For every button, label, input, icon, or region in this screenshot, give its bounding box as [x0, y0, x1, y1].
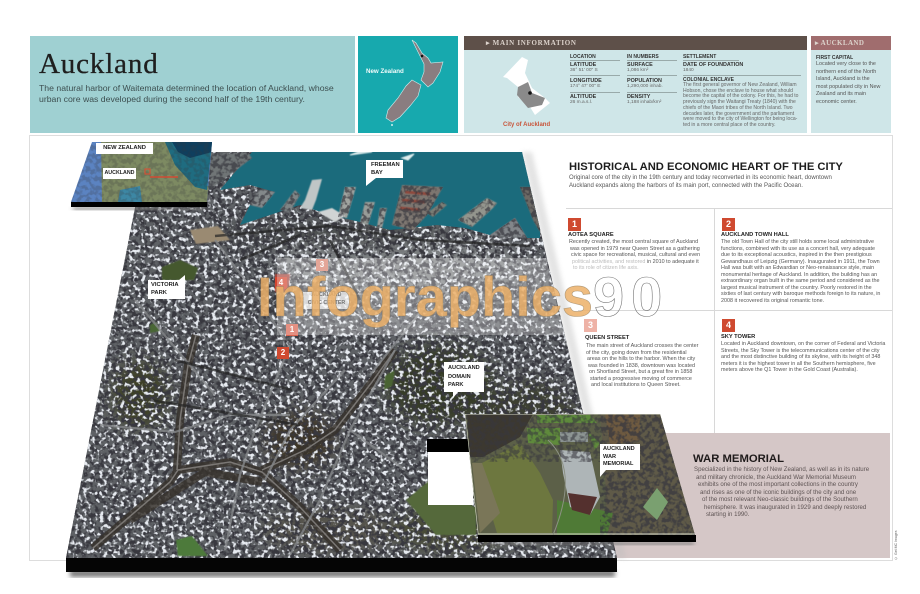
body: Hall was built with an Edwardian or Neo-renaissance style, main	[721, 265, 874, 271]
body: and the most distinctive building of its skyline, with its height of 348	[721, 354, 880, 360]
callout text: AUCKLAND	[448, 365, 480, 371]
text: War Memorial description: of the most relevant Neo-classic buildings of the Southern	[702, 496, 858, 503]
body: extraordinary organ built in the same period and considered as the	[721, 278, 880, 284]
piers	[210, 152, 540, 238]
column: in numbers	[627, 54, 677, 105]
inset: New Zealand satellite map	[70, 142, 212, 210]
body: monumental heritage of Auckland. In addition, the building has an	[721, 272, 877, 278]
motorways	[93, 335, 395, 550]
label: Auckland Civic Center: AUCKLAND	[311, 292, 342, 298]
text: first capital: Zealand and its main	[816, 91, 866, 97]
body: Gewandhaus of Leipzig (Germany). Inaugurated in 1911, the Town	[721, 258, 880, 264]
text: colonial enclave	[683, 82, 798, 128]
column: in numbers: 1,086 km²	[627, 68, 648, 73]
text: first capital: northern end of the North	[816, 69, 876, 75]
item 1: Aotea Square	[568, 218, 700, 271]
aerial map of downtown Auckland	[66, 151, 624, 578]
body	[721, 341, 886, 373]
column: settlement	[683, 54, 801, 128]
body	[586, 343, 698, 388]
callout text: PARK	[151, 290, 167, 296]
column: location: 36° 51' 00" S	[570, 68, 598, 73]
map marker 3	[316, 259, 328, 271]
panel: Auckland first capital	[811, 36, 891, 133]
body: on Shortland Street, but a great fire in 1858	[589, 369, 692, 375]
aerial image	[60, 150, 620, 560]
number 2: 2	[726, 219, 731, 229]
body: due to its exceptional acoustics, inspired in the then prestigious	[721, 252, 872, 258]
body: meters above the Q1 Tower in the Gold Coast (Australia).	[721, 367, 858, 373]
column: settlement: DATE OF FOUNDATION	[683, 62, 743, 68]
map marker 1	[286, 324, 298, 336]
harbour water	[220, 152, 540, 238]
label: New Zealand inset	[96, 143, 153, 154]
body: The main street of Auckland crosses the center	[586, 343, 698, 349]
callout text	[371, 162, 400, 176]
text: first capital: Located very close to the	[816, 61, 876, 67]
callout: Auckland War Memorial	[600, 444, 640, 477]
subheading: first capital: FIRST CAPITAL	[816, 55, 853, 61]
number 2	[722, 218, 735, 231]
panel: main information	[464, 36, 807, 133]
header text: ▸ AUCKLAND	[815, 39, 864, 47]
text: War Memorial description: Specialized in the history of New Zealand, as well as in its nature	[694, 466, 869, 473]
map marker 4: 4	[279, 278, 283, 287]
column: in numbers: 1,290,000 inhab.	[627, 84, 663, 89]
body: civic space for recreational, musical, cultural and even	[571, 252, 700, 258]
title: AOTEA SQUARE	[568, 232, 614, 238]
column: settlement: COLONIAL ENCLAVE	[683, 77, 734, 83]
callout text	[448, 365, 480, 388]
text: War Memorial description: starting in 1990.	[706, 511, 749, 518]
heading: SETTLEMENT	[683, 54, 716, 60]
body	[569, 239, 700, 271]
body: to its role of citizen life axis.	[573, 265, 639, 271]
map: City of Auckland	[503, 57, 550, 115]
title: QUEEN STREET	[585, 335, 629, 341]
heading: historical and economic heart: HISTORICAL AND ECONOMIC HEART OF THE CITY	[569, 161, 843, 173]
map shadow on right	[522, 152, 626, 558]
map marker 4	[275, 277, 287, 289]
label: City of Auckland: City of Auckland	[503, 122, 550, 128]
column: in numbers: 1,188 inhab/km²	[627, 100, 661, 105]
column: in numbers: DENSITY	[627, 94, 650, 100]
credit: © Get MC Images	[894, 531, 898, 560]
callout text: DOMAIN	[448, 374, 471, 380]
text: first capital: economic center.	[816, 99, 857, 105]
heading: LOCATION	[570, 54, 596, 60]
text: colonial enclave: become the capital of the colony. For this, he had to	[683, 93, 798, 99]
body	[721, 239, 880, 304]
icon: New Zealand map	[386, 40, 444, 126]
item 3: Queen Street	[584, 319, 698, 388]
callout text: AUCKLAND	[603, 446, 635, 452]
body: Recently created, the most central square of Auckland	[569, 239, 698, 245]
body: was opened in 1979 near Queen Street as a gathering	[570, 246, 700, 252]
heading: War Memorial: WAR MEMORIAL	[693, 453, 784, 465]
panel: War Memorial	[610, 433, 890, 558]
body: started a progressive moving of commerce	[590, 376, 692, 382]
panel: New Zealand locator map	[358, 36, 458, 133]
map base shadow	[66, 558, 617, 577]
callout text: MEMORIAL	[603, 461, 633, 467]
text: War Memorial description: and military chronicle, the Auckland War Memorial Museum	[696, 474, 856, 480]
column: location: ALTITUDE	[570, 94, 596, 100]
panel: main frame	[29, 135, 893, 561]
body: 2008 it recovered its original romantic tone.	[721, 298, 824, 304]
body: functions, combined with its use as a concert hall, very adequate	[721, 246, 875, 252]
text: War Memorial description	[694, 466, 869, 518]
body: of the city, going down from the residential	[586, 350, 687, 356]
label: Auckland inset	[103, 168, 136, 179]
callout text	[151, 282, 179, 296]
text: section introduction: Auckland expands along the harbors of its main port, connected with the Pacific Ocean.	[569, 183, 803, 189]
callout text	[603, 446, 635, 467]
green areas	[150, 226, 476, 556]
heading: Auckland: Auckland	[39, 48, 159, 80]
heading: IN NUMBERS	[627, 54, 659, 60]
label: New Zealand: New Zealand	[366, 68, 404, 75]
text: War Memorial description: exhibits one of the most important collections in the country	[698, 481, 858, 488]
title: AUCKLAND TOWN HALL	[721, 232, 789, 238]
text: first capital: most populated city in New	[816, 84, 880, 90]
text: section introduction	[569, 174, 832, 189]
item 4: Sky Tower	[721, 319, 886, 373]
text: first capital: Island, Auckland is the	[816, 76, 870, 82]
map marker 3: 3	[320, 260, 324, 269]
number 4	[722, 319, 735, 332]
body: was founded in 1838, downtown was located	[588, 362, 695, 368]
column: settlement: 1840	[683, 68, 694, 73]
header text: ▸ MAIN INFORMATION	[486, 39, 577, 47]
text: colonial enclave: were moved to the city of Wellington for being loca-	[683, 116, 797, 122]
title: SKY TOWER	[721, 334, 755, 340]
body: areas on the hills to the harbor. When the city	[587, 356, 695, 362]
body: Located in Auckland downtown, on the corner of Federal and Victoria	[721, 341, 885, 347]
text: colonial enclave: Hobson, chose the enclave to house what should	[683, 88, 793, 94]
body: Streets, the Sky Tower is the telecommunications center of the city	[721, 348, 879, 354]
text: colonial enclave: decades later, the government and the parliament	[683, 111, 794, 117]
panel: title	[30, 36, 355, 133]
callout text: WAR	[603, 454, 616, 460]
body: and local institutions to Queen Street.	[591, 382, 681, 388]
text: War Memorial description: and rises as one of the iconic buildings of the city and one	[700, 488, 856, 496]
body: sixties of last century with baroque methods foreign to its nature, in	[721, 291, 880, 297]
text: colonial enclave: The first general governor of New Zealand, William	[683, 82, 797, 88]
number 1	[568, 218, 581, 231]
map marker 2	[277, 347, 289, 359]
label: Auckland inset: AUCKLAND	[104, 170, 134, 176]
column: location: 26 m.a.s.l.	[570, 100, 592, 105]
inset: War Memorial aerial	[465, 414, 696, 546]
callout text: FREEMAN	[371, 162, 400, 168]
streets	[100, 240, 430, 555]
text: colonial enclave: previously sign the Waitangi Treaty (1840) with the	[683, 99, 796, 105]
body: meters it is the highest tower in all the Southern hemisphere, five	[721, 360, 876, 366]
callout text: VICTORIA	[151, 282, 179, 288]
label: Auckland Civic Center	[303, 292, 350, 309]
callout text: BAY	[371, 170, 383, 176]
body: The old Town Hall of the city still holds some local administrative	[721, 239, 874, 245]
column: location: 174° 47' 00" E	[570, 84, 600, 89]
text: title introduction: urban core was developed during the second half of the 19th century.	[39, 94, 305, 104]
column: location: LATITUDE	[570, 62, 596, 68]
number 3: 3	[588, 320, 593, 330]
header: Auckland	[811, 36, 891, 50]
callout text: PARK	[448, 382, 463, 388]
map marker 1: 1	[290, 325, 294, 334]
callout: Victoria Park	[148, 275, 185, 299]
map marker 2: 2	[281, 348, 285, 357]
text: section introduction: Original core of the city in the 19th century and today reconverted in its economic heart, downtown	[569, 175, 832, 181]
watermark: Infographics90: Infographics90	[257, 265, 669, 328]
body: political activities, and restored in 2010 to adequate it	[572, 258, 699, 264]
label: New Zealand inset: NEW ZEALAND	[103, 145, 146, 151]
text: colonial enclave: ted in a more central place of the country.	[683, 122, 775, 128]
column: in numbers: SURFACE	[627, 62, 653, 68]
header: main information	[464, 36, 807, 50]
body: largest musical instrument of the country. Poorly restored in the	[721, 284, 872, 290]
label: Auckland Civic Center: CIVIC CENTER	[308, 300, 345, 306]
text: title introduction: The natural harbor of Waitemata determined the location of Auckland, whose	[39, 83, 334, 93]
column: in numbers: POPULATION	[627, 78, 662, 84]
number 1: 1	[572, 219, 577, 229]
item 2: Auckland Town Hall	[721, 218, 880, 304]
callout: Freeman Bay	[366, 160, 403, 186]
text: War Memorial description: hemisphere. It was inaugurated in 1929 and deeply restored	[704, 504, 866, 510]
map white cut-out	[427, 439, 473, 505]
column: location: LONGITUDE	[570, 78, 602, 84]
callout: Auckland Domain Park	[444, 362, 484, 398]
number 4: 4	[726, 320, 731, 330]
text: colonial enclave: chiefs of the Maori tribes of the North Island. Two	[683, 105, 793, 111]
column: location	[570, 54, 620, 105]
text: first capital	[816, 61, 880, 105]
number 3	[584, 319, 597, 332]
text: title introduction	[39, 83, 334, 104]
